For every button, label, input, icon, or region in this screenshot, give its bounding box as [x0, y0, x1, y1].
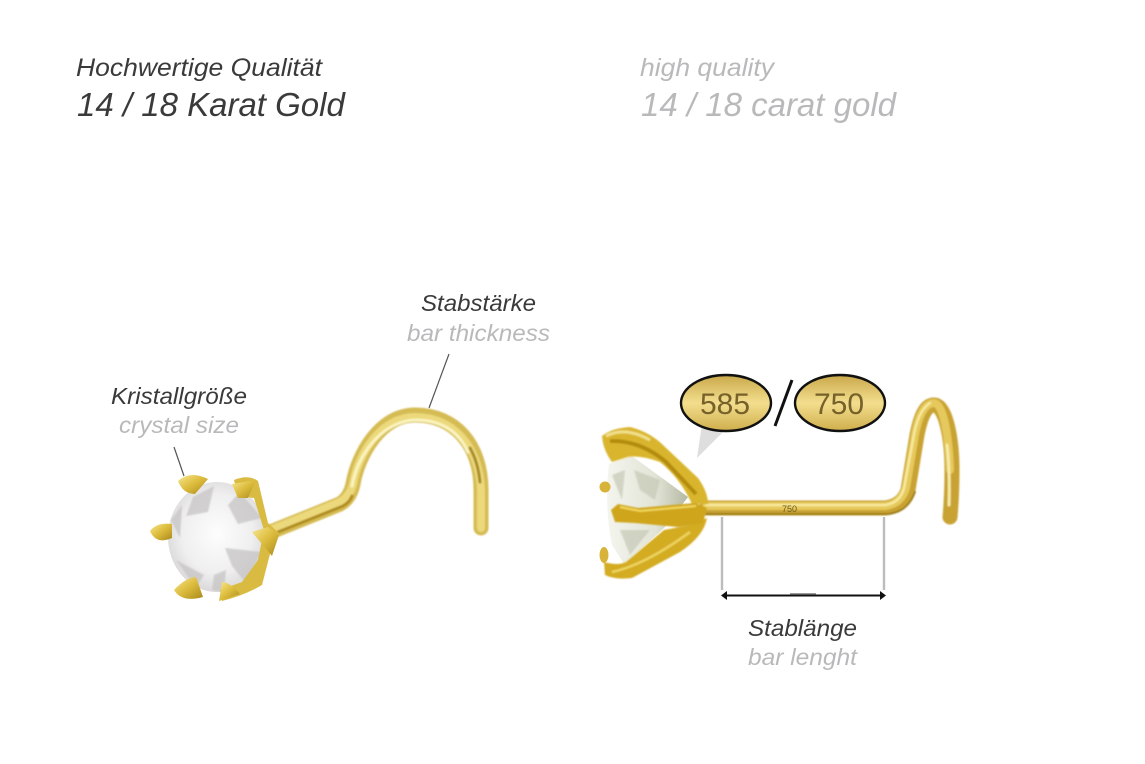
- icon: nose stud front view: [150, 415, 481, 601]
- prongs: [150, 475, 279, 601]
- stamp on bar: 750: [782, 504, 797, 514]
- separator slash: [775, 380, 792, 426]
- label: crystal size: [111, 383, 247, 438]
- icon: 585 hallmark: 585: [700, 388, 750, 421]
- icon: 750 hallmark: 750: [814, 388, 864, 421]
- label: bar thickness: Stabstärke: [421, 290, 536, 316]
- dimension: bar length: [721, 517, 886, 600]
- lower arms: [604, 518, 707, 579]
- label: bar length: bar lenght: [748, 644, 859, 670]
- prong setting: [220, 477, 279, 601]
- icon: 585 hallmark: [681, 375, 771, 431]
- label: bar thickness: bar thickness: [407, 320, 551, 346]
- label: crystal size: crystal size: [119, 412, 239, 438]
- heading: English title: high quality: [640, 54, 776, 82]
- heading: English title: [640, 54, 898, 123]
- label: bar thickness: [407, 290, 551, 346]
- heading: German title: 14 / 18 Karat Gold: [77, 86, 346, 123]
- label: bar length: Stablänge: [748, 615, 857, 641]
- leader line: crystal size: [174, 447, 184, 476]
- setting: [602, 427, 708, 579]
- leader line: bar thickness: [429, 354, 449, 408]
- callout: speech pointer: [697, 424, 726, 458]
- crystal: [607, 456, 688, 564]
- upper arms: [602, 427, 708, 504]
- icon: nose stud side view: [600, 403, 952, 579]
- label: bar length: [748, 615, 859, 670]
- heading: German title: [76, 54, 346, 123]
- stud wire: [706, 403, 952, 517]
- heading: English title: 14 / 18 carat gold: [641, 86, 898, 123]
- icon: 750 hallmark: [795, 375, 885, 431]
- label: crystal size: Kristallgröße: [111, 383, 247, 409]
- side balls: [600, 482, 610, 492]
- stud wire: [273, 415, 481, 532]
- centre prong: [611, 503, 707, 527]
- heading: German title: Hochwertige Qualität: [76, 54, 323, 82]
- crystal: [168, 482, 266, 592]
